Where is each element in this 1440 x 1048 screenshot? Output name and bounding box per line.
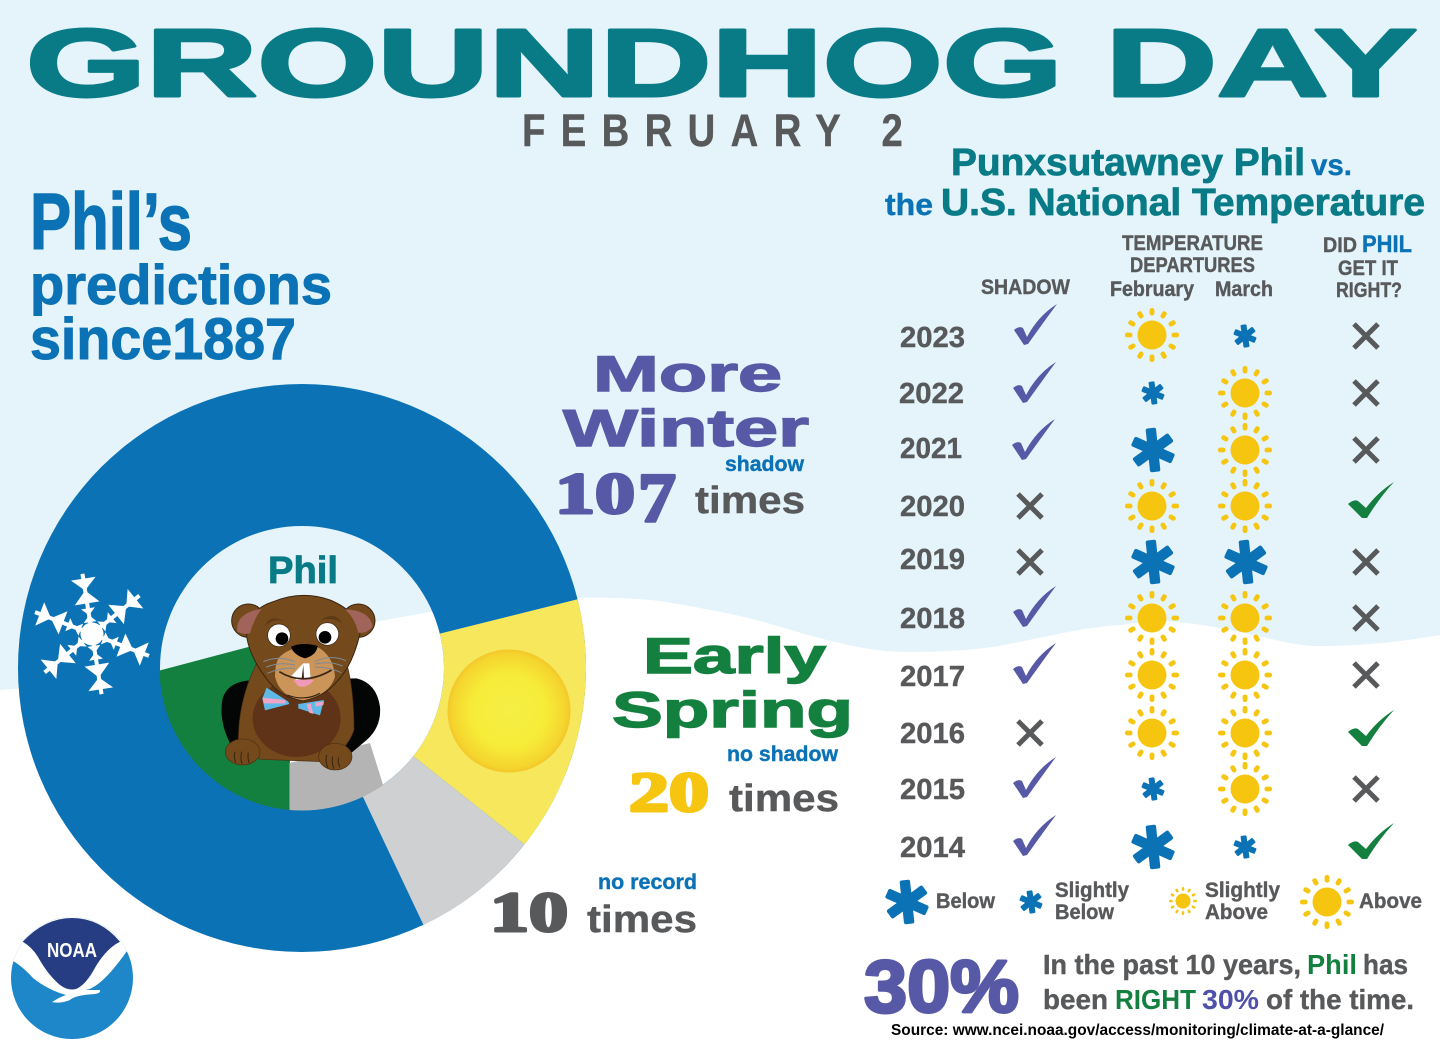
- label: More Winter: times: [695, 480, 805, 522]
- label: Early Spring: 20: [629, 762, 709, 824]
- heading: Punxsutawney Phil vs. the U.S. National Temperature: [885, 142, 1425, 224]
- heading: Phil's predictions: since1887: [30, 307, 296, 372]
- snowflake in blue segment: [31, 572, 153, 696]
- label: no record: no record: [598, 871, 697, 894]
- label: More Winter: 7: [638, 460, 676, 537]
- table headers: GET IT: [1338, 257, 1398, 280]
- icon: Phil the groundhog: [221, 595, 380, 770]
- label: no record: 10: [490, 882, 568, 944]
- heading: Phil's predictions: [30, 177, 332, 372]
- table headers: SHADOW: [981, 276, 1070, 299]
- title: GROUNDHOG DAY: [26, 10, 1417, 117]
- legend: Above: [1205, 901, 1268, 924]
- table headers: DEPARTURES: [1130, 254, 1255, 277]
- table row: 2018: 2018: [900, 603, 965, 635]
- label: Early Spring: times: [729, 778, 839, 820]
- source line: Source: www.ncei.noaa.gov/access/monitoring/climate-at-a-glance/: [891, 1022, 1385, 1039]
- table row: 2016: 2016: [900, 718, 965, 750]
- heading: Phil's predictions: predictions: [30, 253, 332, 316]
- table row: 2023: [900, 304, 1378, 362]
- table row: 2020: [900, 479, 1394, 533]
- table headers: RIGHT?: [1336, 279, 1402, 302]
- callout: 30% accuracy: has: [1363, 949, 1408, 980]
- label: More Winter: [555, 346, 809, 537]
- heading: Punxsutawney Phil vs. the U.S. National Temperature: Punxsutawney Phil: [951, 142, 1305, 184]
- callout: 30% accuracy: [864, 945, 1414, 1028]
- heading: Punxsutawney Phil vs. the U.S. National Temperature: U.S. National Temperature: [941, 182, 1425, 224]
- legend: Slightly: [1055, 879, 1129, 902]
- label: Early Spring: Spring: [612, 682, 853, 738]
- table row: 2021: 2021: [900, 433, 962, 465]
- label: Early Spring: [612, 628, 853, 824]
- subtitle: date: FEBRUARY 2: [522, 105, 903, 156]
- donut chart: Phil's predictions: [18, 384, 586, 952]
- label: no record: [490, 871, 697, 944]
- table row: 2020: 2020: [900, 491, 965, 523]
- segment: no record: [363, 756, 525, 925]
- label: Early Spring: no shadow: [727, 743, 839, 766]
- callout: 30% accuracy: RIGHT: [1115, 984, 1196, 1015]
- table row: 2023: 2023: [900, 322, 965, 354]
- legend: Below: [936, 890, 996, 913]
- label: More Winter: Winter: [563, 400, 809, 458]
- segment: more winter: [18, 384, 586, 952]
- label: More Winter: More: [593, 346, 782, 402]
- callout: 30% accuracy: In the past 10 years,: [1043, 949, 1301, 980]
- table headers: PHIL: [1362, 231, 1412, 258]
- legend: [885, 875, 1422, 929]
- callout: 30% accuracy: 30%: [1202, 984, 1259, 1015]
- table headers: March: [1215, 278, 1273, 301]
- legend: Slightly: [1205, 879, 1280, 902]
- legend: Above: [1359, 890, 1422, 913]
- label: no record: times: [587, 899, 697, 941]
- label: Early Spring: Early: [643, 628, 826, 684]
- table row: 2019: 2019: [900, 544, 965, 576]
- label: More Winter: 10: [555, 461, 635, 526]
- table row: 2022: 2022: [899, 378, 964, 410]
- table headers: TEMPERATURE: [1122, 232, 1263, 255]
- label: More Winter: shadow: [725, 453, 805, 476]
- table headers: [981, 231, 1412, 302]
- logo: NOAA: NOAA: [47, 939, 97, 962]
- callout: 30% accuracy: Phil: [1307, 949, 1357, 980]
- legend: Below: [1055, 901, 1115, 924]
- callout: 30% accuracy: of the time.: [1266, 984, 1414, 1015]
- inner segment: green: [160, 646, 290, 810]
- heading: Punxsutawney Phil vs. the U.S. National Temperature: vs.: [1311, 149, 1352, 182]
- table headers: February: [1110, 278, 1194, 301]
- table row: 2019: [900, 540, 1378, 584]
- table row: 2017: [900, 643, 1378, 702]
- segment: early spring: [413, 599, 586, 844]
- inner segment: gray rock: [290, 743, 383, 810]
- heading: Phil's predictions: Phil’s: [30, 177, 192, 266]
- table row: 2015: 2015: [900, 774, 965, 806]
- table row: 2022: [899, 362, 1378, 420]
- table row: 2018: [900, 586, 1378, 645]
- heading: Punxsutawney Phil vs. the U.S. National Temperature: the: [885, 187, 933, 222]
- table row: 2014: 2014: [900, 832, 965, 864]
- label: Phil: Phil: [268, 550, 338, 592]
- table row: 2016: [900, 706, 1394, 760]
- callout: 30% accuracy: been: [1043, 984, 1108, 1015]
- table row: 2014: [900, 815, 1394, 869]
- snowy hill: [0, 598, 1440, 1048]
- table row: 2015: [900, 757, 1378, 816]
- logo: NOAA: [11, 917, 133, 1039]
- table headers: DID: [1323, 234, 1357, 257]
- sun in yellow segment: [448, 650, 570, 772]
- callout: 30% accuracy: 30%: [864, 945, 1019, 1028]
- table row: 2017: 2017: [900, 661, 965, 693]
- table row: 2021: [900, 419, 1378, 477]
